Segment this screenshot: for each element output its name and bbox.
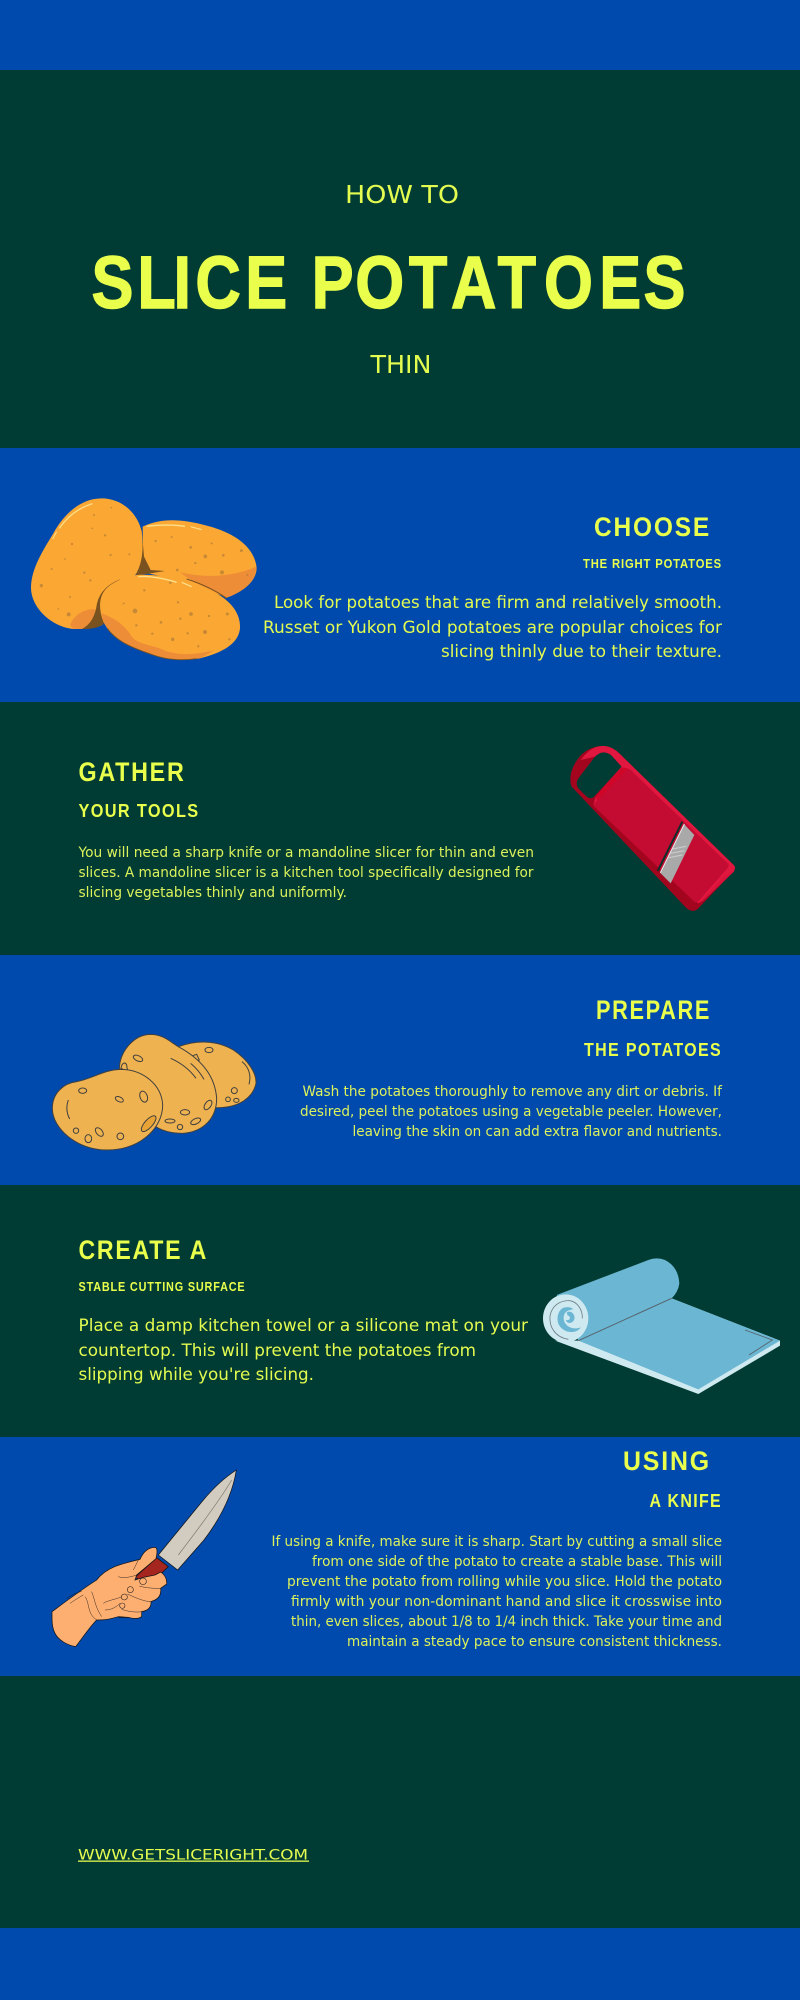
- icon: three orange potatoes: [31, 498, 257, 660]
- subheading: a knife: A KNIFE: [650, 1491, 722, 1511]
- body text: choose: slicing thinly due to their texture.: [441, 642, 722, 661]
- heading: using: USING: [623, 1446, 711, 1476]
- bottom blue band: [0, 1928, 800, 2000]
- body text: create: countertop. This will prevent the potatoes from: [78, 1341, 476, 1360]
- body text: knife: [272, 1534, 722, 1650]
- body text: create: slipping while you're slicing.: [78, 1365, 314, 1384]
- body text: choose: [263, 593, 722, 661]
- body text: prepare: [300, 1084, 723, 1140]
- heading: create a: CREATE A: [78, 1235, 208, 1265]
- body text: knife: prevent the potato from rolling while you slice. Hold the potato: [287, 1574, 722, 1590]
- heading: gather: GATHER: [78, 757, 186, 787]
- body text: prepare: leaving the skin on can add extra flavor and nutrients.: [352, 1124, 722, 1140]
- body text: gather: slices. A mandoline slicer is a kitchen tool specifically designed for: [78, 865, 534, 881]
- icon: red mandoline slicer: [570, 746, 735, 911]
- footer link: WWW.GETSLICERIGHT.COM: [78, 1848, 308, 1864]
- body text: gather: slicing vegetables thinly and uniformly.: [78, 885, 347, 901]
- panel: choose the right potatoes: [0, 448, 800, 702]
- panel: prepare the potatoes: [0, 955, 800, 1185]
- panel: gather your tools: [0, 702, 800, 955]
- subheading: stable cutting surface: STABLE CUTTING SURFACE: [78, 1279, 246, 1294]
- body text: knife: from one side of the potato to create a stable base. This will: [312, 1554, 722, 1570]
- body text: choose: Russet or Yukon Gold potatoes are popular choices for: [263, 618, 722, 637]
- body text: create: Place a damp kitchen towel or a silicone mat on your: [78, 1316, 528, 1335]
- title: slice potatoes: SLICE POTATOES: [92, 241, 685, 324]
- body text: create: [78, 1316, 528, 1384]
- body text: prepare: Wash the potatoes thoroughly to remove any dirt or debris. If: [302, 1084, 723, 1100]
- title line: how to: HOW TO: [345, 180, 459, 209]
- body text: knife: If using a knife, make sure it is sharp. Start by cutting a small slice: [272, 1534, 722, 1550]
- top blue band: [0, 0, 800, 70]
- heading: choose: CHOOSE: [594, 512, 711, 542]
- subheading: the right potatoes: THE RIGHT POTATOES: [583, 556, 722, 571]
- icon: rolled kitchen towel: [543, 1258, 780, 1394]
- body text: gather: You will need a sharp knife or a mandoline slicer for thin and even: [78, 845, 534, 861]
- body text: knife: firmly with your non-dominant hand and slice it crosswise into: [291, 1594, 722, 1610]
- body text: knife: thin, even slices, about 1/8 to 1/4 inch thick. Take your time and: [291, 1614, 722, 1630]
- panel: title: [0, 70, 800, 448]
- icon: hand holding a knife: [52, 1470, 236, 1647]
- body text: gather: [78, 845, 534, 901]
- panel: using a knife: [0, 1437, 800, 1676]
- body text: choose: Look for potatoes that are firm and relatively smooth.: [274, 593, 722, 612]
- panel: footer: [0, 1676, 800, 1928]
- body text: knife: maintain a steady pace to ensure consistent thickness.: [347, 1634, 722, 1650]
- icon: outlined potatoes: [52, 1034, 256, 1150]
- body text: prepare: desired, peel the potatoes using a vegetable peeler. However,: [300, 1104, 722, 1120]
- panel: create a stable cutting surface: [0, 1185, 800, 1437]
- subheading: the potatoes: THE POTATOES: [584, 1040, 722, 1060]
- heading: prepare: PREPARE: [596, 995, 711, 1025]
- title line: thin: THIN: [369, 350, 432, 379]
- subheading: your tools: YOUR TOOLS: [78, 801, 200, 821]
